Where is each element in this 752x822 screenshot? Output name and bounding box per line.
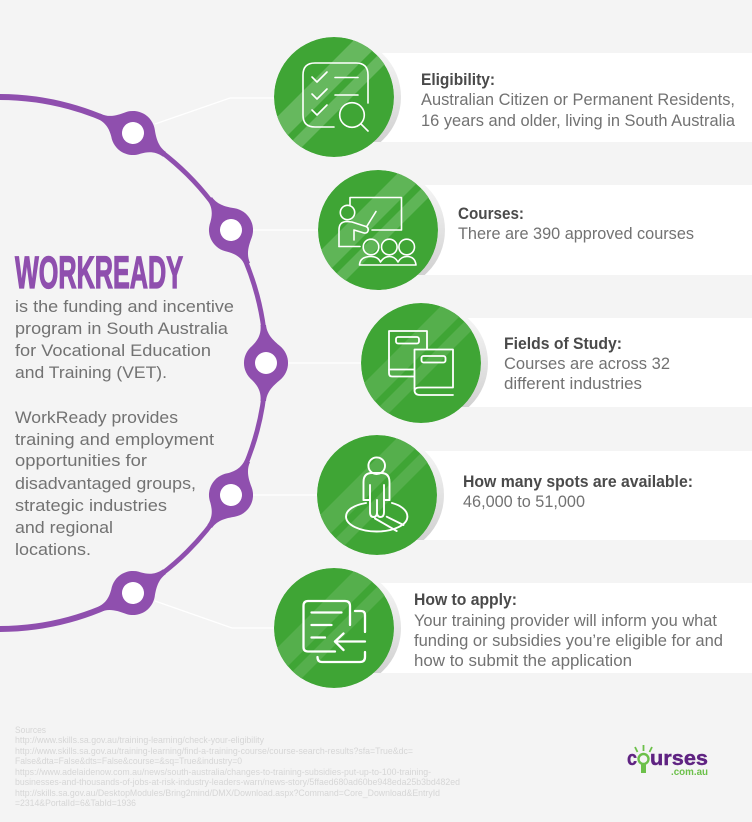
icon: light bulb: [635, 745, 652, 773]
intro text: and Training (VET).: [15, 363, 167, 382]
text: how to apply: [414, 590, 723, 670]
sources: Sources: [15, 725, 46, 736]
text: fields of study: Fields of Study:: [504, 334, 622, 353]
text: eligibility: Eligibility:: [421, 70, 495, 89]
intro text: [15, 297, 234, 559]
text: how to apply: funding or subsidies you’re eligible for and: [414, 631, 723, 650]
text: how to apply: Your training provider will inform you what: [414, 611, 717, 630]
text: spots available: How many spots are available:: [463, 472, 693, 491]
intro text: disadvantaged groups,: [15, 474, 196, 493]
node 2: [193, 186, 269, 274]
green disc: [274, 37, 394, 157]
purple arc with nodes: [0, 95, 288, 631]
intro text: training and employment: [15, 430, 214, 449]
text: eligibility: [421, 70, 736, 130]
text: fields of study: different industries: [504, 374, 642, 393]
panel: courses: [318, 170, 752, 290]
green disc: [361, 303, 481, 423]
sources: http://skills.sa.gov.au/DesktopModules/Bring2mind/DMX/Download.aspx?Command=Core_Download&EntryId: [15, 788, 440, 799]
title: WORKREADY: [15, 247, 183, 298]
intro text: program in South Australia: [15, 319, 229, 338]
sources: =2314&PortalId=6&TabId=1936: [15, 798, 136, 809]
logo: .com.au: [671, 766, 708, 778]
text: eligibility: Australian Citizen or Permanent Residents,: [421, 90, 735, 109]
text: fields of study: Courses are across 32: [504, 354, 670, 373]
text: courses: [458, 204, 694, 243]
connector lines: [155, 98, 365, 628]
text: how to apply: How to apply:: [414, 590, 517, 609]
panel: eligibility: [274, 37, 752, 157]
text: spots available: [463, 472, 693, 511]
text: courses: There are 390 approved courses: [458, 224, 694, 243]
node 5: [89, 555, 177, 631]
green disc: [317, 435, 437, 555]
logo: c: [627, 748, 637, 770]
intro text: and regional: [15, 518, 113, 537]
node 4: [193, 451, 269, 539]
sources: False&dta=False&dts=False&course=&sq=True&industry=0: [15, 756, 242, 767]
sources: https://www.adelaidenow.com.au/news/south-australia/changes-to-training-subsidies-put-up-to-100-training-: [15, 767, 431, 778]
sources: http://www.skills.sa.gov.au/training-learning/check-your-eligibility: [15, 735, 264, 746]
icon: person on pie: [346, 457, 407, 532]
logo: [627, 745, 708, 778]
node 1: [89, 95, 177, 171]
intro text: opportunities for: [15, 451, 147, 470]
intro text: is the funding and incentive: [15, 297, 234, 316]
sources: businesses-and-thousands-of-jobs-at-risk-industry-leaders-warn/news-story/5ffaed680ad60be948eda25b3bd482ed: [15, 777, 460, 788]
green disc: [318, 170, 438, 290]
intro text: strategic industries: [15, 496, 167, 515]
text: fields of study: [504, 334, 670, 393]
icon: checklist with magnifier: [303, 63, 368, 131]
sources: [15, 725, 460, 809]
text: how to apply: how to submit the application: [414, 651, 632, 670]
icon: teacher and class: [339, 198, 416, 265]
icon: books: [389, 331, 453, 395]
green disc: [274, 568, 394, 688]
intro text: WorkReady provides: [15, 408, 178, 427]
text: eligibility: 16 years and older, living in South Australia: [421, 111, 736, 130]
logo: urses: [650, 748, 708, 770]
panel: spots available: [317, 435, 752, 555]
text: spots available: 46,000 to 51,000: [463, 492, 585, 511]
text: courses: Courses:: [458, 204, 524, 223]
sources: http://www.skills.sa.gov.au/training-learning/find-a-training-course/course-search-results?sfa=True&dc=: [15, 746, 413, 757]
intro text: locations.: [15, 540, 91, 559]
panel: how to apply: [274, 568, 752, 688]
intro text: for Vocational Education: [15, 341, 211, 360]
icon: application document: [304, 601, 365, 662]
panel: fields of study: [361, 303, 752, 423]
node 3: [244, 325, 288, 401]
